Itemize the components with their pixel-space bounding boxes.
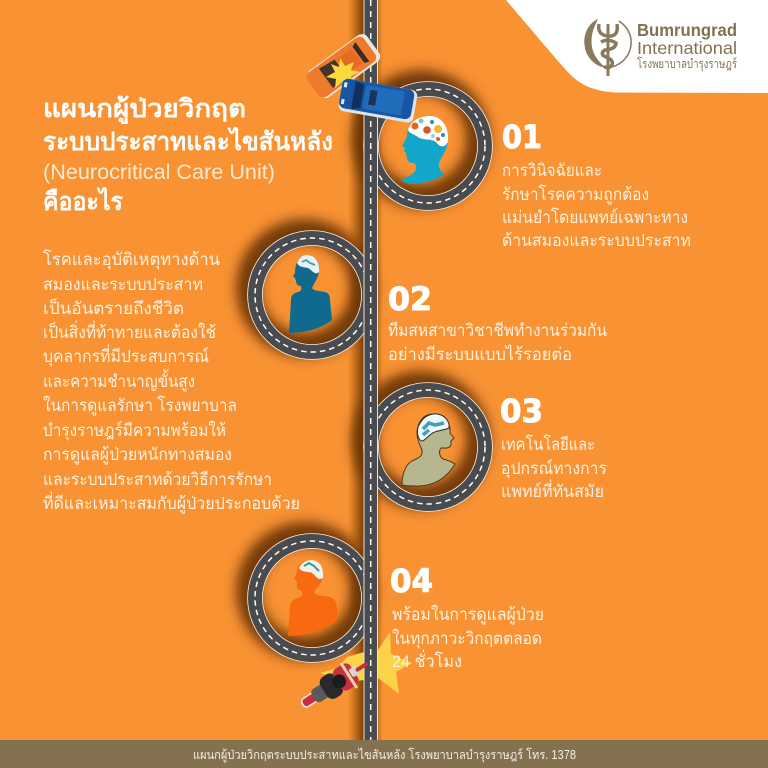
step 04 (390, 562, 544, 671)
step 04 text: พร้อมในการดูแลผู้ป่วย (392, 604, 544, 625)
step 02 text: ทีมสหสาขาวิชาชีพทำงานร่วมกัน (388, 321, 607, 340)
intro paragraph: การดูแลผู้ป่วยหนักทางสมอง (43, 445, 232, 465)
step 01 text: ด้านสมองและระบบประสาท (502, 231, 691, 250)
title: แผนกผู้ป่วยวิกฤต (43, 95, 246, 125)
step 01 text (502, 161, 691, 250)
intro paragraph: โรคและอุบัติเหตุทางด้าน (43, 249, 220, 270)
step 03 (500, 392, 607, 501)
intro paragraph: และความชำนาญขั้นสูง (43, 369, 195, 392)
footer bar (0, 740, 768, 768)
step 02: 02 (388, 280, 432, 318)
loop road 2 (255, 238, 369, 352)
intro paragraph: สมองและระบบประสาท (43, 275, 203, 294)
loop road 1 (371, 89, 485, 203)
step 03: 03 (500, 392, 543, 430)
yellow crash burst left of road (320, 652, 364, 682)
road shadows (248, 82, 478, 648)
title: ระบบประสาทและไขสันหลัง (43, 126, 333, 156)
icon: blue car (338, 78, 418, 124)
icon: crash star (326, 58, 360, 88)
icon: head 1 blue with colourful brain (401, 116, 448, 184)
step 03 text: แพทย์ที่ทันสมัย (501, 479, 604, 501)
icon: head 3 olive (402, 414, 455, 486)
step 01 text: แม่นยำโดยแพทย์เฉพาะทาง (502, 207, 688, 227)
intro paragraph: เป็นอันตรายถึงชีวิต (43, 297, 184, 318)
step 02 text (388, 321, 607, 364)
vertical road (364, 0, 378, 740)
logo: Bumrungrad International: โรงพยาบาลบำรุงราษฎร์ (637, 56, 737, 72)
vertical road shadow (348, 0, 383, 740)
logo: Bumrungrad International: International (637, 38, 737, 58)
loop road 4 (255, 541, 369, 655)
logo name: Bumrungrad (637, 20, 737, 40)
icon: head 2 teal (289, 255, 332, 333)
step 03 text: เทคโนโลยีและ (501, 434, 595, 454)
step 03 text (501, 434, 607, 501)
step 04 text: ในทุกภาวะวิกฤตตลอด (392, 628, 542, 649)
step 04 text (392, 604, 544, 671)
yellow crash burst right of road (378, 632, 412, 694)
intro paragraph (43, 249, 300, 514)
intro paragraph: เป็นสิ่งที่ท้าทายและต้องใช้ (43, 320, 216, 342)
logo white corner panel (506, 0, 768, 93)
intro paragraph: บำรุงราษฎร์มีความพร้อมให้ (43, 420, 226, 441)
intro paragraph: บุคลากรที่มีประสบการณ์ (43, 344, 209, 367)
loop road 3 (371, 390, 485, 504)
icon: caduceus crest (585, 20, 631, 76)
step 02 (388, 280, 607, 364)
step 04: 04 (390, 562, 433, 600)
step 01 text: การวินิจฉัยและ (502, 161, 602, 180)
title: (Neurocritical Care Unit) (43, 160, 275, 184)
step 01: 01 (502, 118, 542, 156)
icon: head 4 orange (288, 560, 337, 636)
title: คืออะไร (43, 186, 124, 216)
step 02 text: อย่างมีระบบแบบไร้รอยต่อ (388, 344, 572, 364)
title (43, 95, 333, 216)
intro paragraph: ที่ดีและเหมาะสมกับผู้ป่วยประกอบด้วย (43, 491, 300, 514)
intro paragraph: และระบบประสาทด้วยวิธีการรักษา (43, 470, 272, 489)
intro paragraph: ในการดูแลรักษา โรงพยาบาล (43, 395, 237, 416)
icon: orange car (304, 31, 383, 102)
icon: motorcycle with rider (294, 651, 376, 718)
step 03 text: อุปกรณ์ทางการ (501, 459, 607, 479)
step 04 text: 24 ชั่วโมง (392, 649, 462, 671)
logo: Bumrungrad International (585, 20, 737, 76)
footer bar: แผนกผู้ป่วยวิกฤตระบบประสาทและไขสันหลัง โรงพยาบาลบำรุงราษฎร์ โทร. 1378 (193, 747, 576, 763)
step 01 (502, 118, 691, 250)
step 01 text: รักษาโรคความถูกต้อง (502, 184, 649, 205)
